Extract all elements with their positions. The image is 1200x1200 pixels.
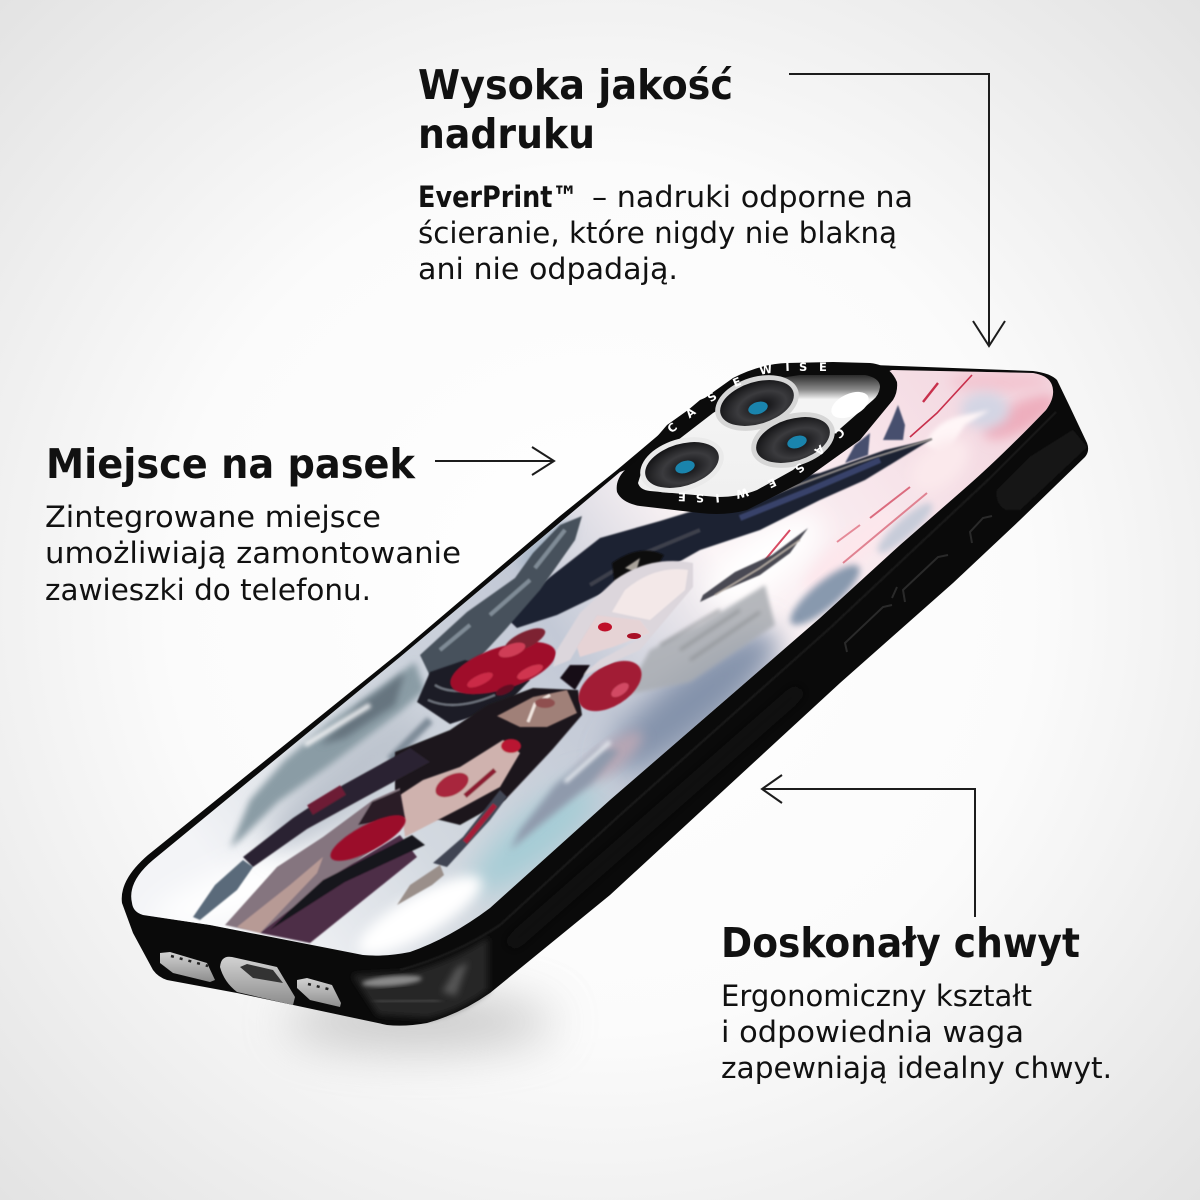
text: grip description: i odpowiednia waga xyxy=(721,1015,1024,1049)
text: print quality description: – nadruki odporne na xyxy=(592,180,913,214)
phone shadow xyxy=(285,996,555,1048)
lens: top xyxy=(708,366,806,440)
heading: strap slot: Miejsce na pasek xyxy=(46,440,417,488)
camera plate xyxy=(638,375,880,497)
lens: right xyxy=(744,403,842,477)
artwork: chest xyxy=(497,690,577,727)
printed artwork xyxy=(131,370,1054,956)
artwork: upper dark wing xyxy=(500,405,932,628)
artwork: hair xyxy=(553,561,693,690)
heading: grip: Doskonały chwyt xyxy=(721,919,1080,967)
artwork: left wing feathers xyxy=(230,662,430,848)
artwork: dark skirt swirl xyxy=(417,660,530,724)
lens: left xyxy=(633,428,731,502)
strap slot hump xyxy=(997,430,1087,510)
text: strap slot description: umożliwiają zamontowanie xyxy=(45,536,461,570)
artwork: legs xyxy=(225,788,425,943)
artwork: right feathers xyxy=(510,742,620,850)
case gloss xyxy=(352,690,800,1018)
artwork: sky and clouds xyxy=(143,372,1062,967)
heading: print quality: nadruku xyxy=(418,110,595,158)
bottom speaker right xyxy=(297,978,341,1007)
phone case xyxy=(100,350,1100,1026)
heading: print quality: Wysoka jakość xyxy=(418,61,733,109)
case body xyxy=(122,363,1088,1026)
side buttons xyxy=(845,516,992,652)
artwork: thin upper feather xyxy=(700,528,808,602)
bottom speaker left xyxy=(160,952,215,982)
arrow: print quality xyxy=(789,74,1005,346)
artwork: left arm xyxy=(193,748,430,920)
artwork: belly xyxy=(400,739,521,837)
camera ring xyxy=(617,360,897,514)
artwork: gray wing xyxy=(420,516,582,680)
artwork: right arm xyxy=(397,790,507,905)
text: grip description: zapewniają idealny chwyt. xyxy=(721,1051,1112,1085)
artwork: red skirt xyxy=(330,814,407,862)
arrow: grip xyxy=(762,775,975,917)
artwork: face xyxy=(577,615,650,657)
text: strap slot description: zawieszki do telefonu. xyxy=(45,573,371,607)
ring brand text: top: CASEWISE xyxy=(664,360,827,436)
ring brand text: bottom: CASEWISE xyxy=(678,425,848,505)
text: strap slot description: Zintegrowane miejsce xyxy=(45,500,381,534)
artwork: light wing xyxy=(625,585,775,695)
text: print quality description: EverPrint™ xyxy=(418,180,578,214)
arrow: strap slot xyxy=(435,447,554,475)
text: grip description: Ergonomiczny kształt xyxy=(721,979,1032,1013)
charging port xyxy=(220,957,295,1005)
artwork: red roses xyxy=(449,627,642,712)
heading: print quality xyxy=(418,61,733,158)
text: strap slot description xyxy=(45,500,461,607)
text: print quality description xyxy=(418,180,913,286)
text: print quality description: ścieranie, które nigdy nie blakną xyxy=(418,216,897,250)
text: grip description xyxy=(721,979,1112,1085)
side rim line xyxy=(400,412,1056,970)
artwork: torso xyxy=(395,688,582,825)
text: print quality description: ani nie odpadają. xyxy=(418,252,678,286)
artwork: red streaks xyxy=(765,375,972,563)
flash xyxy=(827,387,873,423)
